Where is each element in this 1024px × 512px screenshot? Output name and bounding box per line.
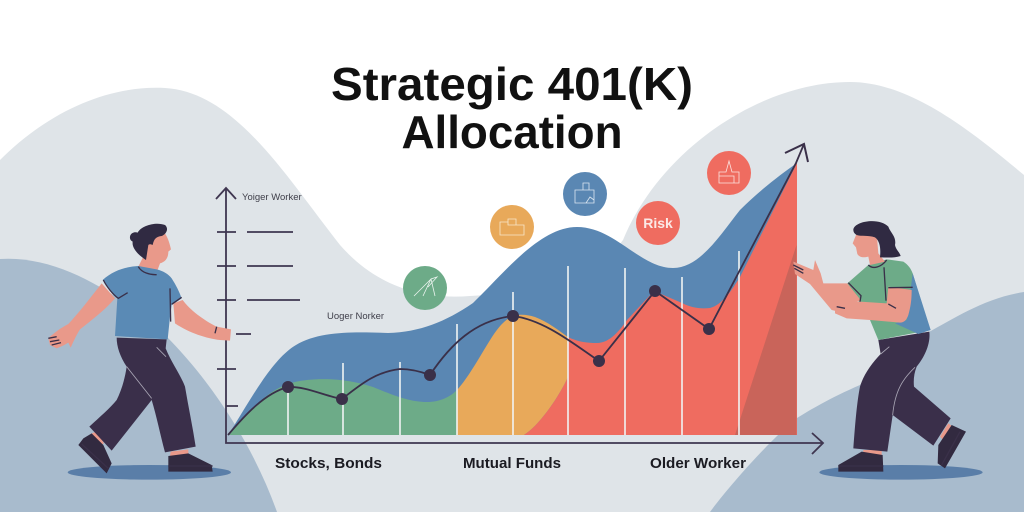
person: older worker bbox=[793, 221, 983, 480]
title bbox=[331, 58, 693, 158]
trend line data points bbox=[282, 285, 715, 405]
axis ticks bbox=[217, 232, 300, 406]
shoes bbox=[78, 433, 213, 473]
shirt bbox=[103, 266, 182, 339]
area: red bbox=[524, 163, 797, 435]
front arm bbox=[835, 287, 912, 323]
head bbox=[138, 233, 171, 271]
person: younger worker bbox=[48, 224, 231, 480]
pants highlight bbox=[127, 347, 166, 398]
trend line bbox=[228, 144, 804, 435]
outline details bbox=[793, 260, 960, 466]
icon: risk badge bbox=[636, 201, 680, 245]
area: orange bbox=[457, 315, 568, 435]
axis label: top: Yoiger Worker bbox=[242, 192, 302, 203]
x-axis labels: Stocks, Bonds bbox=[275, 456, 382, 472]
ankles bbox=[863, 423, 953, 457]
chart: allocation area chart bbox=[216, 144, 823, 454]
pants highlight bbox=[881, 347, 915, 415]
back arm bbox=[793, 260, 861, 312]
shoes bbox=[838, 425, 966, 472]
title: Allocation bbox=[402, 106, 622, 158]
shirt bbox=[847, 259, 930, 340]
icon: blue mutual funds bbox=[563, 172, 607, 216]
pants bbox=[853, 332, 951, 452]
area: green bbox=[228, 379, 457, 435]
axis label: middle: Uoger Norker bbox=[327, 311, 384, 322]
hair bbox=[130, 224, 167, 260]
ankles bbox=[92, 432, 188, 456]
outline details bbox=[48, 267, 217, 468]
icon: green stocks bbox=[403, 266, 447, 310]
shadow bbox=[819, 465, 983, 480]
x-axis labels: Older Worker bbox=[650, 456, 746, 472]
axes bbox=[216, 188, 823, 454]
background: left blue-grey hill bbox=[0, 259, 277, 512]
icon: risk badge: Risk bbox=[643, 215, 673, 231]
shirt blue panel bbox=[895, 273, 931, 334]
back arm bbox=[48, 283, 115, 348]
head bbox=[853, 233, 885, 265]
icon: orange bonds bbox=[490, 205, 534, 249]
hair bbox=[853, 221, 901, 258]
area: blue bbox=[228, 163, 797, 435]
shadow bbox=[68, 465, 231, 480]
area: dark red shade bbox=[735, 245, 796, 435]
arrow: trend arrowhead bbox=[785, 144, 808, 162]
background: right blue-grey hill bbox=[710, 292, 1024, 512]
icon: red building bbox=[707, 151, 751, 195]
title: Strategic 401(K) bbox=[331, 58, 693, 110]
pants bbox=[89, 338, 196, 452]
x-axis labels: Mutual Funds bbox=[463, 456, 561, 472]
white vertical gridlines bbox=[288, 251, 739, 435]
front arm bbox=[173, 300, 231, 341]
x-axis labels bbox=[275, 456, 746, 472]
